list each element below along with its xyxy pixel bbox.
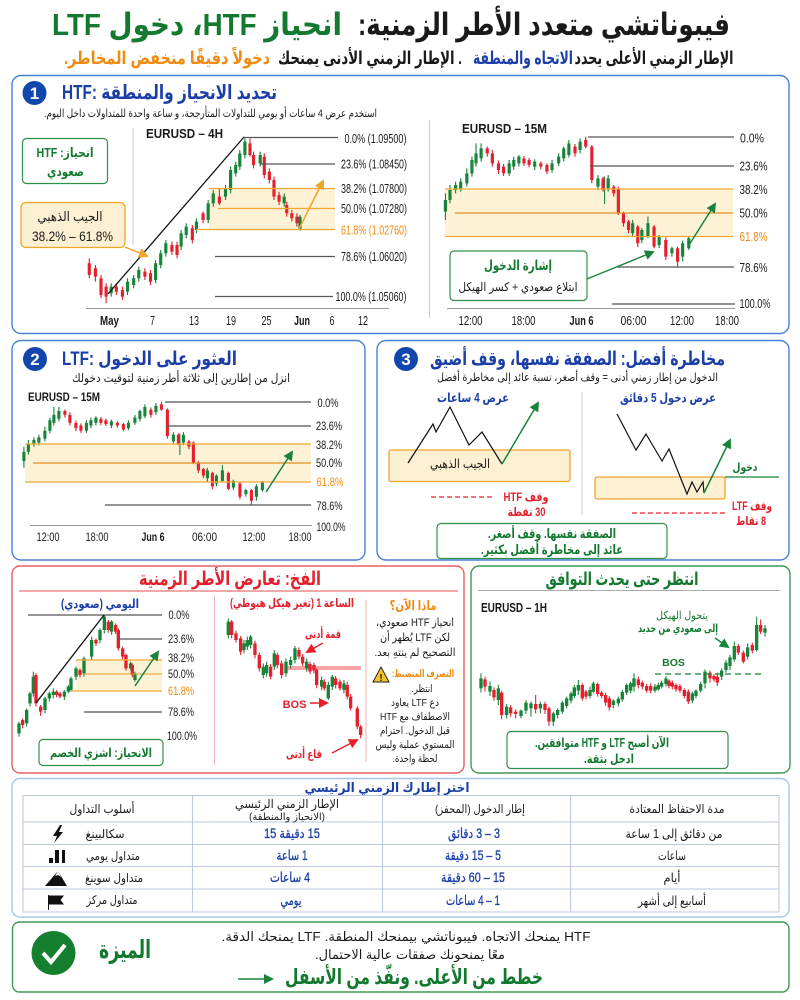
subtitle: الإطار الزمني الأعلى يحدد: [574, 47, 734, 69]
label: edge: الميزة: [99, 936, 151, 965]
table header: (الانحياز والمنطقة): [249, 812, 325, 823]
time axis: 18:00: [288, 532, 312, 544]
text column: what now: المستوي عملية وليس: [376, 739, 454, 751]
title: [52, 5, 730, 43]
number badge 1: [22, 81, 46, 105]
chart: daily bullish: اليومي (صعودي): [61, 597, 139, 611]
time axis 15M: 18:00: [715, 314, 739, 328]
fib labels: 50.0%: [316, 456, 342, 470]
panel: timeframe table: [12, 778, 789, 917]
subtitle: [64, 46, 734, 69]
fib labels: 50.0%: [168, 667, 194, 681]
icon: check: [32, 931, 76, 975]
fib labels: 61.8%: [316, 475, 344, 489]
panel: the edge: معًا يمنحونك صفقات عالية الاحتمال.: [315, 947, 505, 963]
column: entry frame: 15 – 60 دقيقة: [441, 870, 505, 885]
fib labels 15M: 100.0%: [740, 297, 770, 311]
fib labels 15M: [740, 132, 770, 311]
label: lower low: قاع أدنى: [286, 746, 322, 761]
title: انحياز HTF، دخول LTF: [52, 7, 342, 43]
subtitle: الاتجاه والمنطقة: [473, 48, 573, 69]
table header: [70, 797, 724, 823]
time axis: 12:00: [36, 532, 60, 544]
fib labels: 0.0%: [318, 396, 339, 410]
subtitle: . الإطار الزمني الأدنى يمنحك: [278, 47, 462, 69]
table header: أسلوب التداول: [70, 801, 134, 817]
callout: golden pocket: [21, 202, 147, 256]
fib labels 15M: 23.6%: [740, 160, 768, 174]
fib labels 4H: 50.0% (1.07280): [341, 202, 407, 216]
column: primary frame: [264, 826, 320, 909]
callout: aligned: [507, 732, 728, 768]
fib labels 15M: 61.8%: [740, 230, 768, 244]
summary: HTF يمنحك الاتجاه. فيبوناتشي بيمنحك المنطقة. LTF يمنحك الدقة.: [222, 929, 591, 945]
fib labels 15M: 78.6%: [740, 261, 768, 275]
time axis: 06:00: [192, 532, 217, 544]
number badge 3: [394, 347, 418, 371]
callout: same trade smaller stop: عائد إلى مخاطرة أفضل بكثير.: [481, 541, 623, 557]
fib labels 4H: 61.8% (1.02760): [341, 224, 407, 238]
panel: HTF bias and zone: [12, 76, 789, 334]
description: الدخول من إطار زمني أدنى = وقف أصغر، نسبة عائد إلى مخاطرة أفضل: [437, 369, 718, 385]
time axis 4H: 6: [330, 314, 335, 328]
time axis: 12:00: [242, 532, 266, 544]
icon: mountain: [45, 871, 67, 886]
icon: warning: [373, 667, 389, 684]
time axis 4H: May: [100, 314, 119, 328]
icon: warning: !: [379, 673, 383, 684]
text column: what now: التصحيح لم ينتهِ بعد.: [374, 647, 456, 659]
panel: the edge: [12, 922, 789, 992]
column: primary frame: 1 ساعة: [276, 848, 308, 863]
number badge 2: [23, 347, 47, 371]
time axis 15M: 12:00: [458, 314, 483, 328]
disciplined action: التصرف المنضبط:: [392, 668, 454, 680]
diagram: 4H bias: عرض 4 ساعات: [437, 391, 509, 405]
column: entry frame: [441, 826, 505, 908]
slogan: خطط من الأعلى. ونفّذ من الأسفل: [285, 963, 543, 989]
text column: what now: الاصطفاف مع HTF: [380, 711, 450, 723]
column: trading style: متداول سوينغ: [85, 871, 143, 886]
time axis 15M: Jun 6: [570, 314, 594, 328]
label: BOS: BOS: [662, 657, 685, 669]
text column: what now: دع LTF يعاود: [391, 697, 439, 709]
time axis 15M: 12:00: [670, 314, 694, 328]
fib labels 4H: 0.0% (1.09500): [344, 132, 406, 146]
column: holding period: أسابيع إلى أشهر: [637, 892, 706, 909]
fib labels: [316, 396, 346, 534]
diagram: 4H bias: الجيب الذهبي: [430, 457, 490, 471]
table grid: [23, 796, 779, 912]
fib labels: 0.0%: [168, 608, 190, 622]
time axis 4H: 12: [358, 314, 368, 328]
label: BOS: [283, 699, 327, 711]
diagram: 4H bias: وقف HTF: [504, 490, 548, 505]
fib labels: 100.0%: [316, 520, 346, 534]
number badge 3: 3: [401, 350, 411, 369]
panel: better risk: [377, 340, 789, 560]
column: entry frame: 5 – 15 دقيقة: [445, 848, 501, 863]
heading: HTF: تحديد الانحياز والمنطقة: [62, 82, 277, 104]
column: holding period: من دقائق إلى 1 ساعة: [626, 827, 722, 842]
fib labels: 61.8%: [168, 684, 194, 698]
arrow: [238, 978, 272, 980]
label: lower low: [286, 740, 357, 761]
fib labels 4H: [336, 132, 407, 304]
number badge 2: 2: [30, 350, 40, 369]
callout: golden pocket: 38.2% – 61.8%: [32, 228, 113, 244]
time axis 4H: 13: [189, 314, 199, 328]
callout: entry signal: ابتلاع صعودي + كسر الهيكل: [458, 280, 578, 295]
text column: what now: انحياز HTF صعودي،: [376, 617, 454, 629]
chart: daily bullish: [19, 597, 197, 766]
label: structure turns bullish: [638, 610, 728, 647]
table header: إطار الدخول (المحفز): [435, 802, 525, 817]
time axis 15M: 18:00: [512, 314, 536, 328]
fib labels: 23.6%: [316, 419, 342, 433]
callout: HTF bias bullish: [22, 138, 108, 184]
column: entry frame: 1 – 4 ساعات: [446, 893, 500, 908]
time axis: 18:00: [86, 532, 108, 544]
number badge 1: 1: [30, 84, 39, 103]
fib labels: 78.6%: [316, 499, 343, 513]
heading: انتظر حتى يحدث التوافق: [546, 569, 698, 590]
time axis 4H: [100, 314, 368, 328]
time axis 4H: 19: [226, 314, 236, 328]
callout: same trade smaller stop: [437, 524, 667, 558]
chart: EURUSD 1H: [481, 601, 765, 726]
callout: entry signal: [450, 251, 653, 300]
label: structure turns bullish: إلى صعودي من جديد: [638, 623, 718, 635]
fib labels: [167, 608, 197, 743]
text column: what now: ماذا الآن؟: [390, 598, 436, 613]
fib labels 4H: 38.2% (1.07800): [341, 182, 407, 196]
panel: LTF entry: [12, 340, 365, 560]
description: انزل من إطارين إلى ثلاثة أطر زمنية لتوقيت دخولك: [72, 370, 290, 386]
fib labels: 100.0%: [167, 729, 197, 743]
fib labels 4H: 78.6% (1.06020): [341, 250, 407, 264]
column: trading style: متداول مركز: [86, 893, 138, 908]
diagram: 5M entry: 8 نقاط: [736, 514, 766, 528]
diagram: 5M entry: وقف LTF: [732, 499, 772, 514]
column: entry frame: 3 – 3 دقائق: [448, 826, 500, 842]
diagram: 5M entry: دخول: [732, 462, 758, 475]
callout: golden pocket: الجيب الذهبي: [38, 209, 102, 224]
column: primary frame: 4 ساعات: [270, 870, 310, 885]
fib labels: 38.2%: [316, 438, 342, 452]
column: trading style: [85, 827, 143, 908]
fib labels: 78.6%: [168, 705, 194, 719]
text column: what now: لحظة واحدة.: [392, 753, 438, 765]
arrow: rebound: [135, 652, 158, 686]
chart: EURUSD 15M: EURUSD – 15M: [462, 121, 547, 136]
arrow: bullish move: [689, 204, 715, 245]
diagram: 4H bias: 30 نقطة: [507, 505, 546, 519]
fib labels 15M: 50.0%: [740, 206, 768, 220]
time axis 15M: 06:00: [620, 314, 647, 328]
heading: اختر إطارك الزمني الرئيسي: [304, 780, 470, 795]
fib labels: 38.2%: [168, 651, 194, 665]
fib labels: 23.6%: [168, 632, 194, 646]
column: primary frame: 15 دقيقة 15: [264, 826, 320, 841]
label: lower high: قمة أدنى: [305, 626, 341, 641]
time axis 4H: 7: [150, 314, 155, 328]
table header: مدة الاحتفاظ المعتادة: [630, 802, 724, 816]
column: holding period: ساعات: [658, 849, 686, 863]
text column: what now: [373, 598, 456, 765]
text column: what now: لكن LTF يُظهر أن: [380, 630, 450, 644]
column: holding period: أيام: [664, 869, 680, 885]
icon: bars: [49, 850, 65, 863]
label: structure turns bullish: يتحول الهيكل: [656, 610, 708, 622]
chart: EURUSD 15M: [445, 121, 770, 328]
callout: bias: الانحياز: اشزي الخصم: [50, 746, 152, 760]
description: استخدم عرض 4 ساعات أو يومي للتداولات المتأرجحة، و ساعة واحدة للمتداولات داخل اليوم.: [44, 105, 377, 120]
diagram: 5M entry: [595, 391, 779, 528]
chart: EURUSD 4H: EURUSD – 4H: [146, 126, 223, 141]
icon: lightning: [53, 825, 63, 843]
table header: الإطار الزمني الرئيسي: [235, 797, 339, 812]
time axis 4H: 25: [262, 314, 272, 328]
text column: what now: انتظر.: [412, 683, 432, 695]
callout: HTF bias bullish: انحياز: HTF: [36, 145, 94, 160]
callout: same trade smaller stop: الصفقة نفسها. وقف أصغر.: [488, 525, 616, 541]
column: holding period: [626, 827, 722, 909]
chart: 1H bearish structure: [228, 596, 361, 761]
callout: aligned: الآن أصبح LTF و HTF متوافقين.: [535, 734, 669, 750]
column: trading style: متداول يومي: [86, 849, 140, 864]
fib labels 4H: 100.0% (1.05060): [336, 290, 406, 304]
icon: flag: [48, 895, 63, 910]
chart: EURUSD 4H: [86, 126, 407, 328]
chart: EURUSD 15M: [24, 390, 346, 544]
time axis: Jun 6: [142, 532, 164, 544]
heading: LTF: العثور على الدخول: [62, 349, 237, 370]
text column: what now: قبل الدخول. احترام: [380, 725, 450, 737]
fib labels 15M: 0.0%: [740, 132, 764, 146]
fib labels 15M: 38.2%: [740, 183, 768, 197]
callout: aligned: ادخل بثقة.: [584, 752, 634, 766]
column: primary frame: يومي: [280, 893, 302, 909]
panel: the trap: [12, 566, 464, 773]
label: lower high: [305, 626, 341, 652]
callout: entry signal: إشارة الدخول: [484, 258, 552, 273]
panel: wait for alignment: [471, 566, 790, 773]
diagram: 4H bias: [389, 391, 570, 519]
chart: EURUSD 1H: EURUSD – 1H: [481, 601, 547, 615]
fib labels 4H: 23.6% (1.08450): [341, 158, 407, 172]
label: BOS: BOS: [283, 699, 306, 711]
heading: الفخ: تعارض الأطر الزمنية: [139, 567, 321, 590]
callout: HTF bias bullish: صعودي: [47, 164, 84, 179]
column: trading style: سكالبينغ: [86, 827, 124, 841]
arrow: rebound: [299, 181, 323, 229]
time axis: [36, 532, 312, 544]
callout: bias: [39, 740, 163, 766]
time axis 4H: Jun: [294, 314, 310, 328]
subtitle: دخولاً دقيقًا منخفض المخاطر.: [64, 46, 270, 69]
chart: 1H bearish structure: الساعة 1 (تغير هيكل هبوطي): [230, 596, 354, 611]
diagram: 5M entry: عرض دخول 5 دقائق: [620, 391, 716, 405]
arrow: bullish move: [266, 452, 292, 492]
chart: EURUSD 15M: EURUSD – 15M: [28, 390, 100, 404]
time axis 15M: [458, 314, 739, 328]
